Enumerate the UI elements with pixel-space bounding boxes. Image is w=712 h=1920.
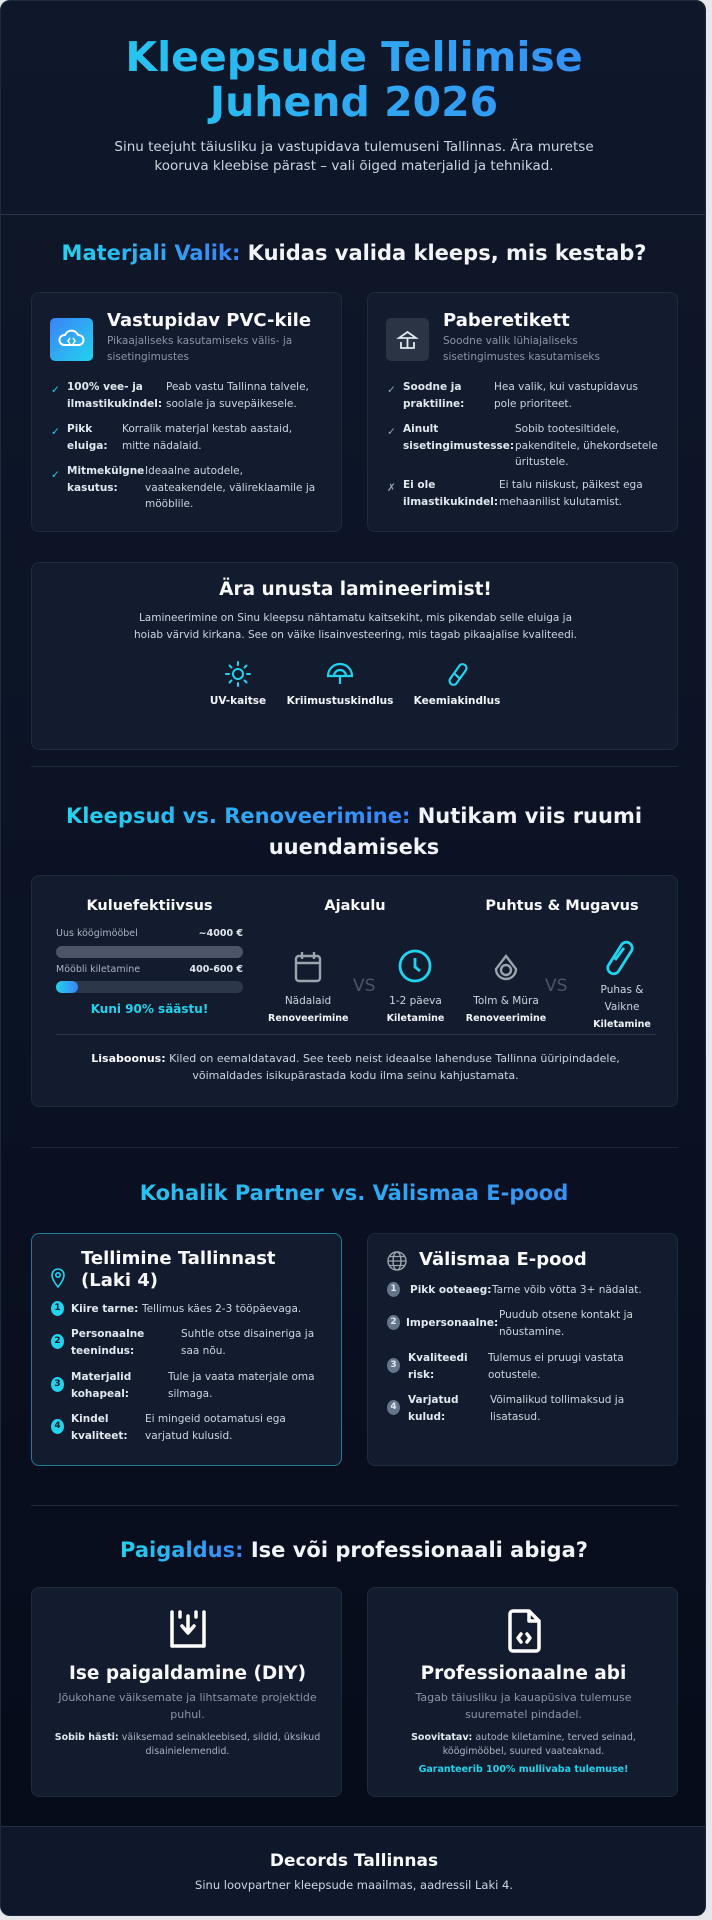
panel: pro [367, 1587, 678, 1797]
icon: globe [387, 1251, 407, 1271]
heading: materjali valik: Materjali Valik: Kuidas valida kleeps, mis kestab? [62, 241, 646, 265]
column: time: Nädalaid [285, 995, 331, 1007]
panel: laminate: Lamineerimine on Sinu kleepsu nähtamatu kaitsekiht, mis pikendab selle eluiga ja [139, 612, 572, 624]
heading: kleepsud vs renoveerimine: uuendamiseks [269, 835, 439, 859]
subtitle: kooruva kleebise pärast – vali õiged materjalid ja tehnikad. [154, 158, 554, 174]
item list: Sobib tootesiltidele, [515, 423, 619, 435]
items: kulud: [408, 1410, 445, 1422]
icon: chemical [414, 663, 500, 707]
items: kvaliteet: [71, 1430, 128, 1442]
title [1, 35, 707, 125]
item list: pole prioriteet. [494, 398, 572, 410]
item list: ✓ [387, 426, 396, 438]
item list: Ei talu niiskust, päikest ega [499, 479, 643, 491]
item list: pakenditele, ühekordsetele [515, 440, 658, 452]
items: nõustamine. [499, 1326, 564, 1338]
item list: ✓ [51, 469, 60, 481]
items: Kvaliteedi [408, 1352, 468, 1364]
item list: ilmastikukindel: [403, 496, 498, 508]
column: clean: Puhas & [601, 984, 643, 996]
panel: DIY: Jõukohane väiksemate ja lihtsamate projektide puhul. [58, 1691, 317, 1721]
column: clean: Renoveerimine [466, 1013, 546, 1024]
items: 3 [390, 1360, 397, 1370]
column: clean [466, 898, 651, 1030]
footer [1, 1826, 707, 1920]
items: Pikk ooteaeg: [410, 1284, 491, 1296]
items: Kiire tarne: [71, 1303, 138, 1315]
column: time [268, 898, 444, 1024]
title: Kleepsude Tellimise [125, 33, 583, 81]
column: time: VS [353, 976, 375, 996]
panel: paberetikett: sisetingimustes kasutamiseks [443, 351, 600, 363]
item list: Korralik materjal kestab aastaid, [122, 423, 292, 435]
item list: Pikk [67, 423, 92, 435]
items: Puudub otsene kontakt ja [499, 1309, 633, 1321]
item list: Ei ole [403, 479, 435, 491]
panel: PVC: sisetingimustes [107, 351, 189, 363]
column: time: 1-2 päeva [389, 995, 442, 1007]
items: Suhtle otse disaineriga ja [181, 1328, 314, 1340]
items: Tulemus ei pruugi vastata [488, 1352, 624, 1364]
items: varjatud kulusid. [145, 1430, 232, 1442]
panel: pro: Garanteerib 100% mullivaba tulemuse! [419, 1764, 628, 1775]
panel: PVC [31, 292, 342, 532]
icon: UV [210, 661, 266, 707]
item list: Soodne ja [403, 381, 461, 393]
items: Ei mingeid ootamatusi ega [145, 1413, 286, 1425]
heading: Professionaalne abi [421, 1663, 626, 1684]
panel: laminate: hoiab värvid kirkana. See on väike lisainvesteering, mis tagab pikaajalise kvaliteedi. [134, 628, 577, 640]
column: clean: VS [545, 976, 567, 996]
items: kohapeal: [71, 1388, 129, 1400]
items: Impersonaalne: [406, 1317, 498, 1329]
items: ootustele. [488, 1368, 540, 1380]
panel: pro: Tagab täiusliku ja kauapüsiva tulemuse suurematel pindadel. [416, 1691, 631, 1721]
heading: Ise paigaldamine (DIY) [69, 1663, 306, 1684]
item list: vaateakendele, välireklaamile ja [145, 482, 315, 494]
item list: Ideaalne autodele, [145, 465, 243, 477]
column: cost [56, 898, 243, 1016]
icon: scratch [287, 662, 393, 707]
subtitle [114, 138, 594, 174]
panel: PVC: Pikaajaliseks kasutamiseks välis- ja [107, 335, 292, 347]
item list: eluiga: [67, 440, 108, 452]
heading [81, 1248, 276, 1291]
heading: kleepsud vs renoveerimine: Kleepsud vs. Renoveerimine: Nutikam viis ruumi [66, 804, 642, 828]
item list: Hea valik, kui vastupidavus [494, 381, 638, 393]
panel: DIY [31, 1587, 342, 1797]
heading: Tellimine Tallinnast [81, 1248, 276, 1269]
icon: UV: UV-kaitse [210, 695, 266, 707]
panel: paberetikett [367, 292, 678, 532]
icon: pin [51, 1268, 65, 1288]
item list: ✓ [51, 384, 60, 396]
bonus note [91, 1052, 620, 1082]
column: clean: Tolm & Müra [473, 995, 539, 1007]
item list: ilmastikukindel: [67, 398, 162, 410]
icon: file code [508, 1609, 541, 1653]
item list [387, 381, 658, 508]
item list: soolale ja suvepäikesele. [166, 398, 297, 410]
items: teenindus: [71, 1344, 134, 1356]
items: 2 [390, 1317, 397, 1327]
item list: ✓ [387, 384, 396, 396]
items: Tule ja vaata materjale oma [168, 1371, 315, 1383]
item list: mitte nädalaid. [122, 440, 202, 452]
items: lisatasud. [490, 1410, 540, 1422]
heading: kohalik partner [1, 1181, 707, 1205]
items: 1 [54, 1303, 61, 1313]
footer: Decords Tallinnas [270, 1851, 438, 1871]
items: Varjatud [408, 1394, 459, 1406]
items: Võimalikud tollimaksud ja [490, 1394, 624, 1406]
heading: kohalik partner: Kohalik Partner vs. Välismaa E-pood [140, 1181, 568, 1205]
column: cost: Kuni 90% säästu! [91, 1002, 208, 1016]
items: 2 [54, 1336, 61, 1346]
items: 1 [390, 1284, 397, 1294]
items: risk: [408, 1368, 434, 1380]
column: cost: Uus köögimööbel [56, 928, 138, 939]
title: Juhend 2026 [210, 78, 498, 126]
bonus note: Lisaboonus: Kiled on eemaldatavad. See teeb neist ideaalse lahenduse Tallinna üüripindadele, [91, 1052, 620, 1065]
heading: Paberetikett [443, 310, 570, 331]
subtitle: Sinu teejuht täiusliku ja vastupidava tulemuseni Tallinnas. Ära muretse [114, 139, 594, 155]
items: Tellimus käes 2-3 tööpäevaga. [142, 1303, 301, 1315]
footer: Sinu loovpartner kleepsude maailmas, aadressil Laki 4. [195, 1878, 513, 1892]
item list: Ainult [403, 423, 438, 435]
icon: chemical: Keemiakindlus [414, 695, 500, 707]
item list: praktiline: [403, 398, 464, 410]
item list: kasutus: [67, 482, 118, 494]
heading: (Laki 4) [81, 1270, 158, 1291]
column: time: Ajakulu [324, 898, 386, 914]
item list: üritustele. [515, 456, 568, 468]
item list: mehaanilist kulutamist. [499, 496, 622, 508]
heading: Välismaa E-pood [419, 1249, 587, 1270]
items: Materjalid [71, 1371, 131, 1383]
column: cost: Mööbli kiletamine [56, 964, 140, 975]
icon: scratch: Kriimustuskindlus [287, 695, 393, 707]
items [387, 1282, 642, 1422]
panel: comparison [31, 875, 678, 1107]
column: clean: Kiletamine [593, 1019, 651, 1030]
items: silmaga. [168, 1388, 212, 1400]
icon: download [170, 1610, 206, 1648]
heading: Vastupidav PVC-kile [107, 310, 311, 331]
heading: Ära unusta lamineerimist! [219, 579, 492, 600]
items: saa nõu. [181, 1344, 226, 1356]
items: Personaalne [71, 1328, 144, 1340]
item list: ✗ [387, 482, 396, 494]
items: Tarne võib võtta 3+ nädalat. [492, 1284, 642, 1296]
panel: local [31, 1233, 342, 1466]
heading: kleepsud vs renoveerimine [66, 804, 642, 859]
column: time: Renoveerimine [268, 1013, 348, 1024]
item list: Peab vastu Tallinna talvele, [166, 381, 309, 393]
item list: sisetingimustesse: [403, 440, 514, 452]
items: 4 [54, 1421, 61, 1431]
item list [51, 381, 315, 510]
panel: PVC: mööblile. [145, 498, 193, 510]
items: Kindel [71, 1413, 108, 1425]
item list: Mitmekülgne [67, 465, 144, 477]
panel: foreign [367, 1233, 678, 1466]
panel: paberetikett: Soodne valik lühiajaliseks [443, 335, 578, 347]
column: cost: Kuluefektiivsus [86, 898, 213, 914]
bonus note: võimaldades isikupärastada kodu ilma seinu kahjustamata. [192, 1069, 519, 1082]
panel: laminate [31, 562, 678, 750]
column: cost: ~4000 € [199, 928, 243, 939]
item list: 100% vee- ja [67, 381, 143, 393]
column: cost: 400-600 € [189, 964, 243, 975]
column: time: Kiletamine [387, 1013, 444, 1024]
panel: pro: Soovitatav: autode kiletamine, terved seinad, köögimööbel, suured vaateaknad. [411, 1732, 636, 1757]
items: 4 [390, 1402, 397, 1412]
heading: paigaldus: Paigaldus: Ise või professionaali abiga? [120, 1538, 588, 1562]
column: clean: Vaikne [605, 1001, 639, 1013]
icon: box [386, 318, 429, 361]
icon: cloud [50, 318, 93, 361]
items [51, 1301, 315, 1442]
panel: DIY: Sobib hästi: väiksemad seinakleebised, sildid, üksikud disainielemendid. [55, 1732, 320, 1757]
items: 3 [54, 1379, 61, 1389]
column: clean: Puhtus & Mugavus [485, 898, 639, 914]
item list: ✓ [51, 426, 60, 438]
